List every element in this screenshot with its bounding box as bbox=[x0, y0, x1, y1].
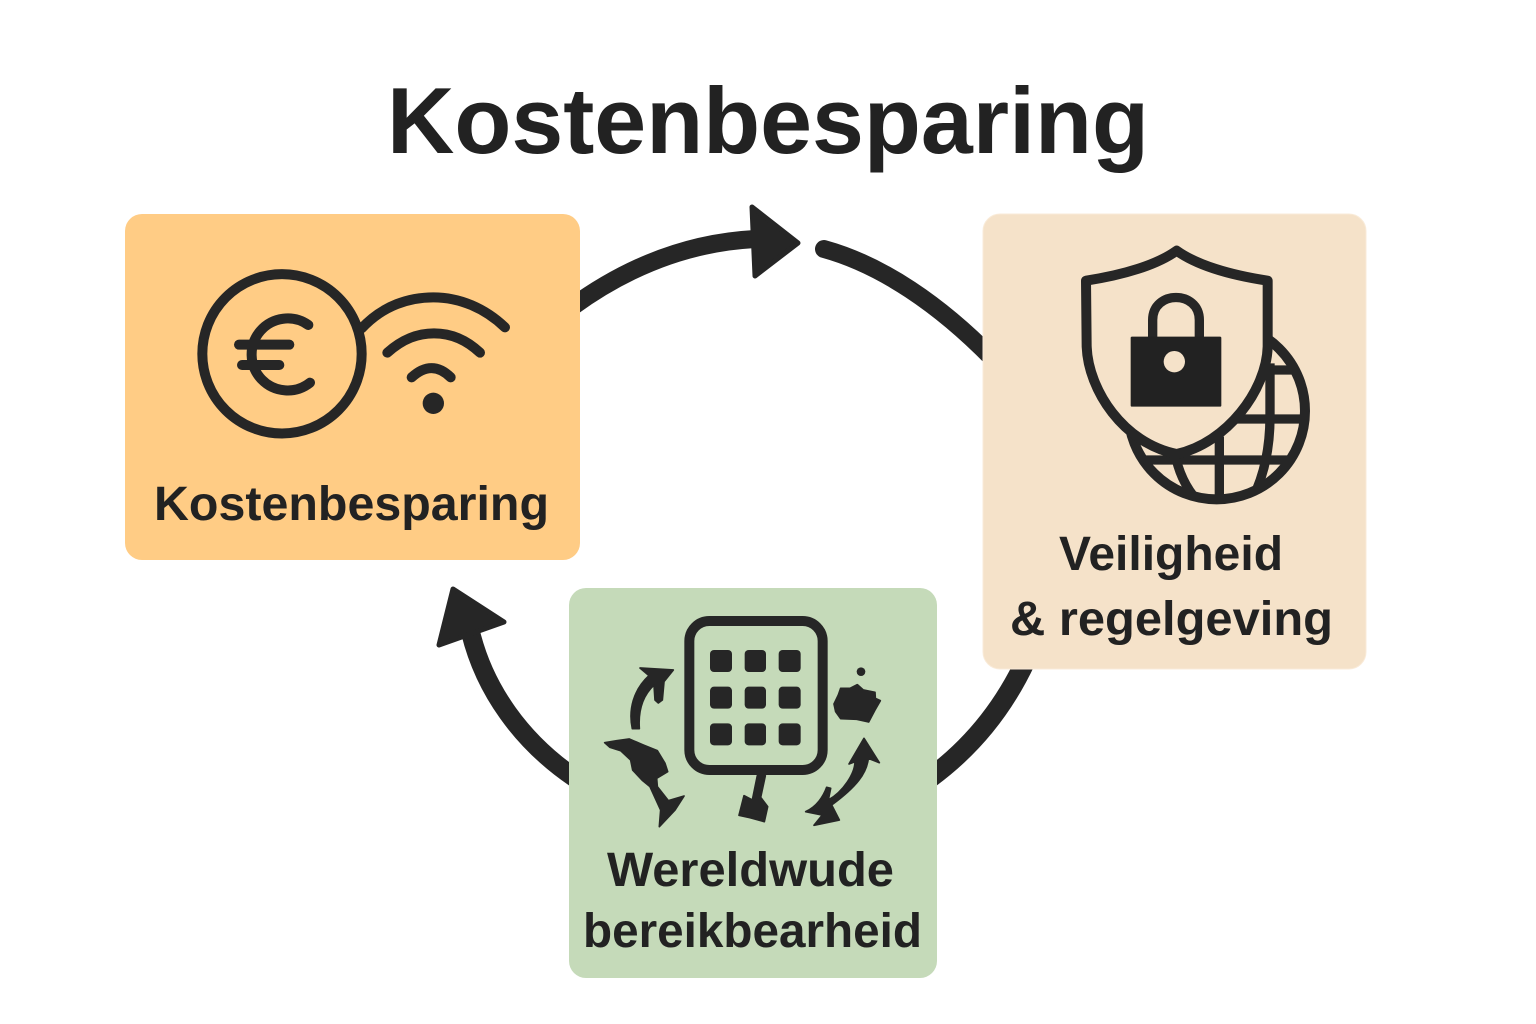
icon: app grid with continents and arrows bbox=[605, 621, 880, 827]
panel: Veiligheid en regelgeving bbox=[983, 214, 1366, 669]
label: Veiligheid & regelgeving: & regelgeving bbox=[1010, 593, 1333, 646]
label: Wereldwude bereikbearheid: Wereldwude bbox=[607, 844, 894, 897]
icon: shield, padlock and globe bbox=[1086, 251, 1308, 502]
arrow: cost saving to security bbox=[572, 207, 798, 307]
arrow: reachability to cost saving bbox=[439, 589, 575, 778]
icon: euro coin and wifi bbox=[202, 274, 505, 433]
panel: Wereldwijde bereikbaarheid bbox=[569, 588, 937, 978]
arrow: bottom right connector bbox=[930, 660, 1026, 778]
title: Kostenbesparing bbox=[387, 68, 1149, 173]
label: Veiligheid & regelgeving: Veiligheid bbox=[1059, 528, 1283, 581]
panel: Kostenbesparing bbox=[125, 214, 580, 560]
label: Wereldwude bereikbearheid bbox=[583, 844, 922, 958]
label: Kostenbesparing: Kostenbesparing bbox=[154, 478, 549, 531]
arrow: top right connector bbox=[824, 249, 992, 358]
label: Wereldwude bereikbearheid: bereikbearheid bbox=[583, 905, 922, 958]
label: Veiligheid & regelgeving bbox=[1010, 528, 1333, 646]
